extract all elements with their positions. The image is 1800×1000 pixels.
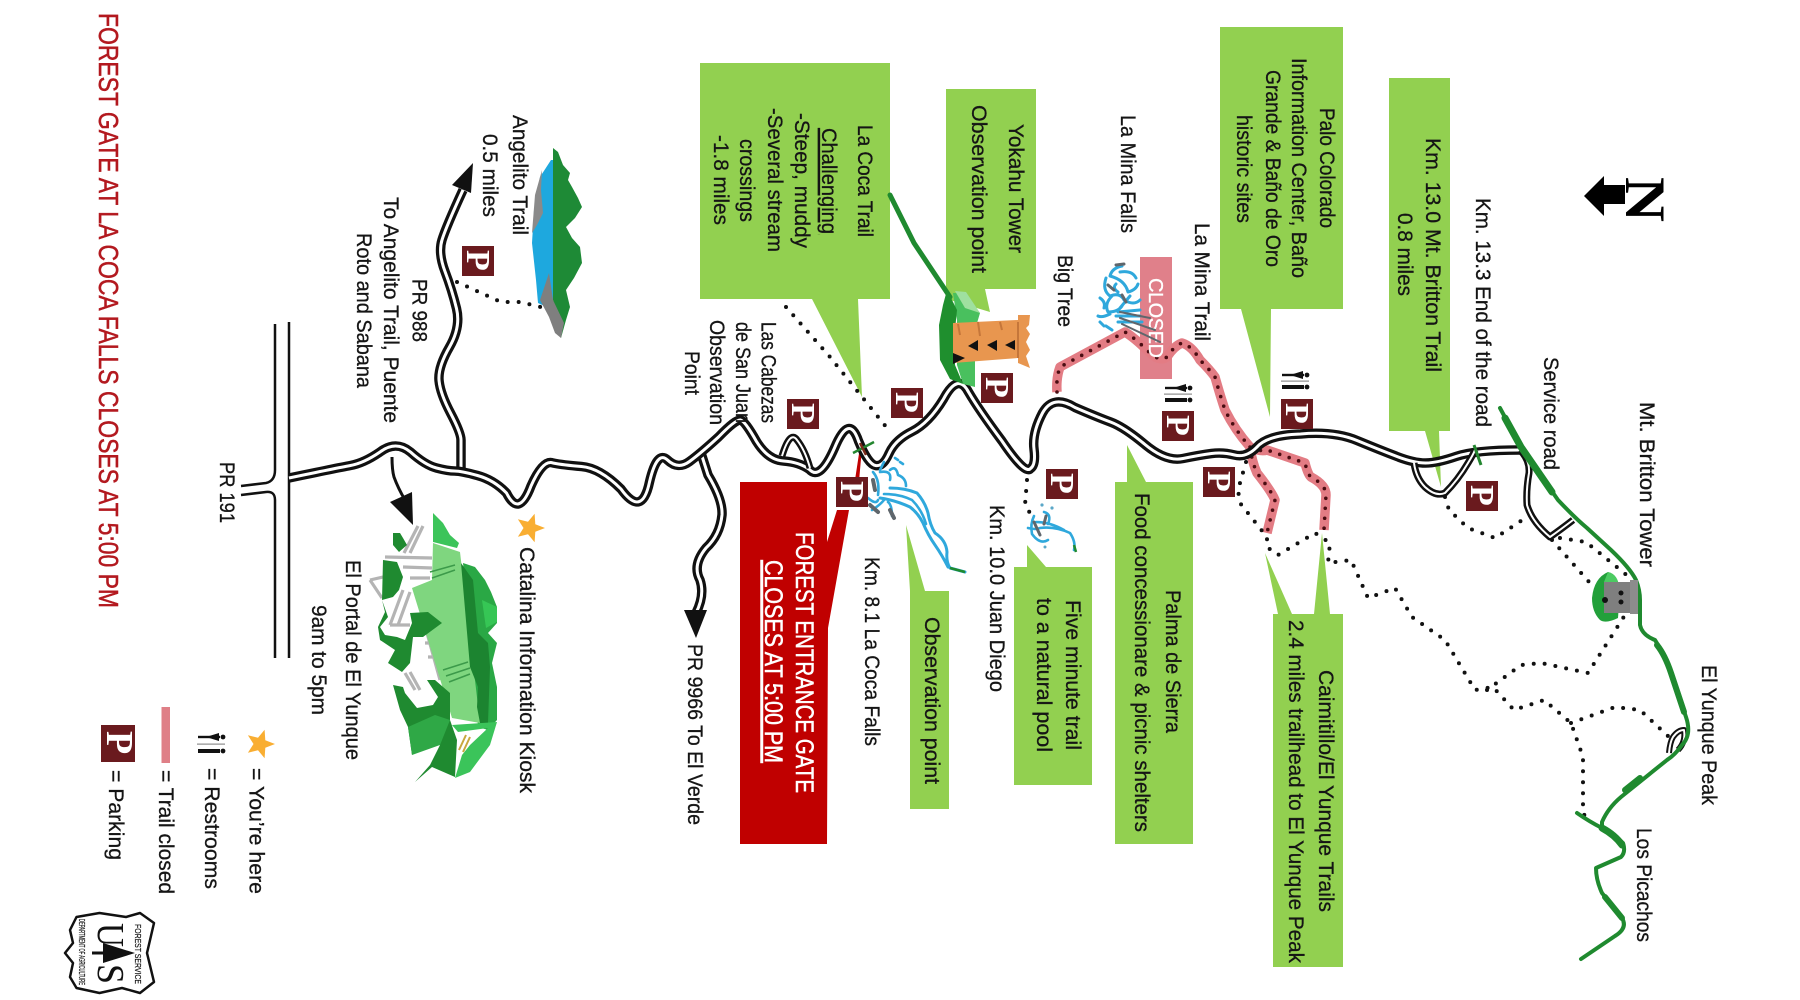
closed sign text: CLOSED <box>1144 278 1166 358</box>
logo: US Forest Service shield: FOREST SERVICE <box>133 924 142 984</box>
callout: Caimitillo / El Yunque Trails: 2.4 miles trailhead to El Yunque Peak <box>1284 620 1308 963</box>
labels: map place names: Observation <box>705 320 729 425</box>
illustration: Angelito river <box>532 148 582 338</box>
labels: map place names <box>215 115 1721 942</box>
labels: map place names: Mt. Britton Tower <box>1635 402 1659 567</box>
labels: map place names: Big Tree <box>1053 255 1077 327</box>
icon: parking markers: P <box>888 392 925 413</box>
callout: Palo Colorado <box>1220 27 1343 417</box>
trail: La Coca green trail <box>890 195 950 297</box>
callout: forest entrance gate closes: CLOSES AT 5:00 PM <box>759 560 787 763</box>
callout: Yokahu Tower <box>946 89 1036 312</box>
callout: Km 13.0 Mt. Britton Trail <box>1389 78 1450 487</box>
labels: map place names: La Mina Trail <box>1190 223 1214 341</box>
icon: parking markers: P <box>1200 471 1237 492</box>
labels: map place names: Las Cabezas <box>756 322 780 423</box>
icon: parking markers: P <box>1159 415 1196 436</box>
callout: Palo Colorado: historic sites <box>1232 115 1256 223</box>
labels: map place names: Service road <box>1539 357 1563 470</box>
callout: five minute trail <box>1014 545 1092 785</box>
logo: US Forest Service shield <box>65 913 154 993</box>
icon: parking markers <box>459 246 1500 511</box>
callout: Yokahu Tower: Yokahu Tower <box>1004 124 1028 253</box>
icon: parking markers: P <box>978 377 1015 398</box>
callout: five minute trail: to a natural pool <box>1032 598 1056 752</box>
icon: you're here star <box>518 514 545 542</box>
callout: Palo Colorado: Information Center, Baño <box>1287 58 1311 278</box>
labels: map place names: La Mina Falls <box>1116 115 1140 233</box>
callout: observation point: Observation point <box>920 617 944 784</box>
legend: trail closed <box>154 707 178 894</box>
icon: parking markers: P <box>1043 473 1080 494</box>
callout: forest entrance gate closes: FOREST ENTRANCE GATE <box>790 532 818 793</box>
labels: map place names: 9am to 5pm <box>307 605 331 715</box>
labels: map place names: To Angelito Trail, Puente <box>379 197 403 423</box>
callout: La Coca Trail: crossings <box>735 139 759 222</box>
legend <box>98 707 275 894</box>
callout: observation point <box>906 525 949 809</box>
arrow: to El Portal <box>390 457 413 525</box>
labels: map place names: Km. 13.3 End of the road <box>1471 198 1495 427</box>
callout: La Coca Trail: -Steep, muddy <box>790 113 814 248</box>
icon: La Coca Falls <box>868 458 965 572</box>
callout: forest entrance gate closes <box>740 447 862 844</box>
icon: restrooms at Palo Colorado <box>1281 371 1309 389</box>
callout: Palma de Sierra <box>1115 445 1193 844</box>
legend: parking <box>98 725 140 860</box>
labels: map place names: El Portal de El Yunque <box>341 560 365 760</box>
title: forest gate closing notice: FOREST GATE AT LA COCA FALLS CLOSES AT 5:00 PM <box>93 13 124 608</box>
callout: five minute trail: Five minute trail <box>1061 600 1085 750</box>
logo: US Forest Service shield: U <box>89 923 131 947</box>
labels: map place names: Point <box>680 351 704 395</box>
icon: parking markers: P <box>1463 485 1500 506</box>
labels: map place names: 0.5 miles <box>478 134 502 217</box>
labels: map place names: Roto and Sabana <box>352 233 376 388</box>
road: end of road loop and service road <box>1414 450 1573 537</box>
legend: trail closed: = Trail closed <box>154 770 178 894</box>
icon: Mt. Britton Tower <box>1592 572 1638 622</box>
labels: map place names: Catalina Information Kiosk <box>515 547 539 793</box>
road: El Yunque Peak loop <box>1669 730 1684 753</box>
icon: parking markers: P <box>784 403 821 424</box>
legend: restrooms: = Restrooms <box>200 768 224 889</box>
road: PR 988 branch with arrow <box>439 163 473 471</box>
legend: parking: = Parking <box>104 770 128 860</box>
callout: Palma de Sierra: Palma de Sierra <box>1161 590 1185 733</box>
callout: La Coca Trail: La Coca Trail <box>853 125 877 237</box>
trails: dotted hiking routes <box>457 282 1669 820</box>
callout: Yokahu Tower: Observation point <box>967 105 991 273</box>
callout: La Coca Trail: -1.8 miles <box>709 135 733 225</box>
logo: US Forest Service shield: S <box>89 964 131 984</box>
callout: Palma de Sierra: Food concessionare & picnic shelters <box>1130 493 1154 832</box>
icon: north arrow <box>1584 176 1676 222</box>
callout: La Coca Trail: -Several stream <box>763 108 787 252</box>
labels: map place names: de San Juan <box>731 322 755 423</box>
icon: parking markers: P <box>1278 403 1315 424</box>
legend: you're here: = You’re here <box>244 768 268 894</box>
labels: map place names: PR 988 <box>408 279 432 342</box>
mark: gate at end of road <box>1474 445 1481 465</box>
legend: restrooms <box>197 733 225 889</box>
callout: La Coca Trail <box>700 63 890 397</box>
labels: map place names: Angelito Trail <box>508 115 532 235</box>
icon: parking markers: P <box>459 250 496 271</box>
icon: north arrow: N <box>1613 177 1676 222</box>
callout: Palo Colorado: Grande & Baño de Oro <box>1261 70 1285 267</box>
callout: Caimitillo / El Yunque Trails: Caimitillo/El Yunque Trails <box>1314 670 1338 912</box>
labels: map place names: PR 191 <box>215 462 239 523</box>
mark: gate at La Coca <box>853 442 874 455</box>
trail closed: La Mina pink route <box>1057 332 1326 533</box>
icon: Juan Diego Falls <box>1028 503 1076 552</box>
road: main forest road PR 191 <box>289 383 1520 504</box>
closed sign panel <box>1140 257 1172 379</box>
labels: map place names: El Yunque Peak <box>1697 665 1721 805</box>
callout: Palo Colorado: Palo Colorado <box>1315 108 1339 228</box>
legend: you're here <box>244 730 275 894</box>
icon: restrooms at Palma de Sierra <box>1164 384 1192 402</box>
labels: map place names: Km. 8.1 La Coca Falls <box>860 557 884 746</box>
labels: map place names: PR 9966 To El Verde <box>683 644 707 825</box>
road: PR 191 highway <box>241 322 289 658</box>
labels: map place names: Los Picachos <box>1632 828 1656 942</box>
road: small spur loop near La Coca <box>782 437 810 468</box>
callout: Caimitillo / El Yunque Trails <box>1265 533 1343 967</box>
trails: green ridge trail to El Yunque and Los Picachos <box>1500 408 1688 959</box>
labels: map place names: Km. 10.0 Juan Diego <box>985 505 1009 692</box>
illustration: El Portal building <box>370 513 497 782</box>
legend: parking: P <box>98 731 140 754</box>
icon: La Mina Falls <box>1098 264 1160 342</box>
icon: parking markers: P <box>833 481 870 502</box>
road: PR 9966 branch with arrow <box>684 453 722 638</box>
icon: Yokahu Tower <box>939 290 1030 387</box>
callout: Km 13.0 Mt. Britton Trail: Km. 13.0 Mt. Britton Trail <box>1421 138 1445 372</box>
callout: La Coca Trail: Challenging <box>817 128 841 234</box>
callout: Km 13.0 Mt. Britton Trail: 0.8 miles <box>1393 213 1417 296</box>
